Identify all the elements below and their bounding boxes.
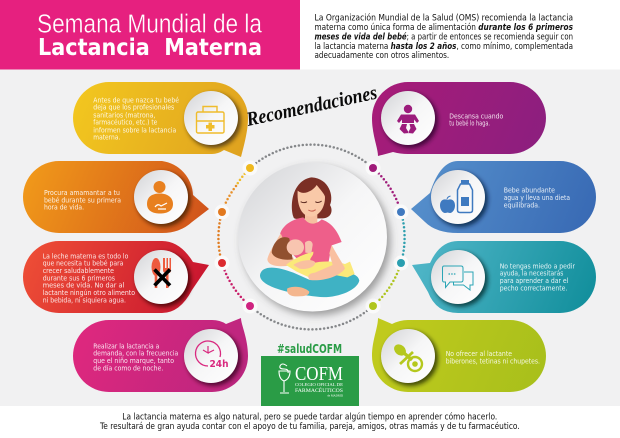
- panel: red exclusive breastfeeding: [23, 241, 209, 313]
- panel: yellow prenatal advice: materna.: [93, 134, 120, 142]
- logo: COFM: [261, 356, 359, 406]
- panel: teal ask for help: pecho correctamente.: [500, 284, 567, 292]
- closing text: Te resultará de gran ayuda contar con el apoyo de tu familia, pareja, amigos, otras mamás y de tu farmacéutico.: [99, 421, 520, 432]
- panel: purple rest: [372, 82, 546, 156]
- panel: blue hydration and diet: agua y lleva una dieta: [504, 194, 570, 202]
- logo: COFM: COLEGIO OFICIAL DE: [295, 382, 343, 387]
- panel: orange first hour: bebé durante su primera: [44, 196, 121, 204]
- icon: nursing mother: [147, 181, 173, 214]
- intro text block: la lactancia materna hasta los 2 años, como mínimo, complementada: [314, 42, 573, 52]
- panel: purple rest: tu bebé lo haga.: [449, 120, 490, 128]
- closing text: [99, 412, 520, 432]
- gray content background: [0, 70, 620, 406]
- title banner: Semana Mundial de la: [37, 11, 263, 39]
- logo: COFM: FARMACÉUTICOS: [295, 386, 343, 394]
- panel: teal ask for help: ayuda, la necesitarás: [500, 270, 564, 278]
- panel: pink on-demand feeding: [73, 318, 248, 392]
- closing text: La lactancia materna es algo natural, pero se puede tardar algún tiempo en aprender cómo hacerlo.: [122, 412, 497, 422]
- intro text block: [314, 13, 573, 61]
- central disc with mother and baby: [238, 162, 390, 316]
- ring nodes: [214, 160, 408, 314]
- panel: red exclusive breastfeeding: durante sus 6 primeros: [43, 274, 115, 282]
- icon: 24 hour clock: 24h: [210, 359, 228, 370]
- panel: pink on-demand feeding: que el niño marque, tanto: [93, 357, 174, 365]
- panel: green no pacifiers: biberones, tetinas ni chupetes.: [446, 358, 540, 366]
- heading: Recomendaciones: Recomendaciones: [244, 82, 379, 131]
- dotted ring: [218, 145, 405, 329]
- icon: apple and water bottle: [440, 180, 472, 213]
- panel: orange first hour: [23, 161, 209, 233]
- panel: red exclusive breastfeeding: crecer saludablemente: [43, 267, 114, 275]
- icon: baby: [397, 105, 419, 134]
- icon: pacifier: [392, 342, 422, 371]
- panel: blue hydration and diet: equilibrada.: [504, 201, 540, 209]
- panel: yellow prenatal advice: informen sobre la lactancia: [93, 126, 176, 134]
- logo: COFM: de MADRID: [327, 394, 344, 398]
- panel: yellow prenatal advice: deja que los profesionales: [93, 104, 175, 112]
- panel: orange first hour: hora de vida.: [44, 204, 84, 212]
- icon: crossed cutlery: [152, 258, 171, 288]
- logo: COFM: COFM: [295, 363, 343, 385]
- panel: red exclusive breastfeeding: meses de vida. No dar al: [43, 282, 124, 290]
- panel: orange first hour: Procura amamantar a tu: [44, 189, 120, 197]
- title banner: Lactancia Materna: [38, 33, 262, 61]
- panel: red exclusive breastfeeding: que necesita tu bebé para: [43, 260, 123, 268]
- panel: pink on-demand feeding: demanda, con la frecuencia: [93, 350, 178, 358]
- panel: blue hydration and diet: Bebe abundante: [504, 187, 555, 195]
- title banner: [0, 0, 300, 70]
- icon: snake and cup: [279, 364, 290, 393]
- panel: yellow prenatal advice: Antes de que nazca tu bebé: [93, 96, 179, 104]
- panel: blue hydration and diet: [411, 161, 596, 233]
- intro text block: La Organización Mundial de la Salud (OMS) recomienda la lactancia: [314, 13, 573, 24]
- panel: red exclusive breastfeeding: La leche materna es todo lo: [43, 252, 128, 260]
- icon: first aid kit: [196, 106, 224, 133]
- panel: pink on-demand feeding: de día como de noche.: [93, 365, 163, 373]
- panel: red exclusive breastfeeding: ni bebida, ni siquiera agua.: [43, 297, 126, 305]
- icon: 24 hour clock: [195, 341, 228, 370]
- panel: green no pacifiers: [372, 318, 546, 392]
- panel: green no pacifiers: No ofrecer al lactante: [446, 350, 512, 358]
- illustration: breastfeeding mother: [260, 177, 359, 297]
- intro text block: materna como única forma de alimentación durante los 6 primeros: [314, 22, 573, 33]
- icon: chat bubbles: [442, 266, 473, 290]
- intro text block: adecuadamente con otros alimentos.: [314, 51, 449, 61]
- panel: purple rest: Descansa cuando: [449, 112, 503, 120]
- panel: teal ask for help: para aprender a dar el: [500, 277, 568, 285]
- hashtag: #saludCOFM: [277, 342, 342, 356]
- panel: yellow prenatal advice: farmacéutico, etc.) te: [93, 119, 157, 127]
- panel: pink on-demand feeding: Realizar la lactancia a: [93, 342, 159, 350]
- intro text block: meses de vida del bebé; a partir de entonces se recomienda seguir con: [314, 31, 573, 42]
- panel: yellow prenatal advice: sanitarios (matrona,: [93, 111, 155, 119]
- panel: teal ask for help: [412, 241, 596, 313]
- panel: teal ask for help: No tengas miedo a pedir: [500, 262, 575, 270]
- panel: red exclusive breastfeeding: lactante ningún otro alimento: [43, 289, 135, 297]
- panel: yellow prenatal advice: [73, 82, 248, 157]
